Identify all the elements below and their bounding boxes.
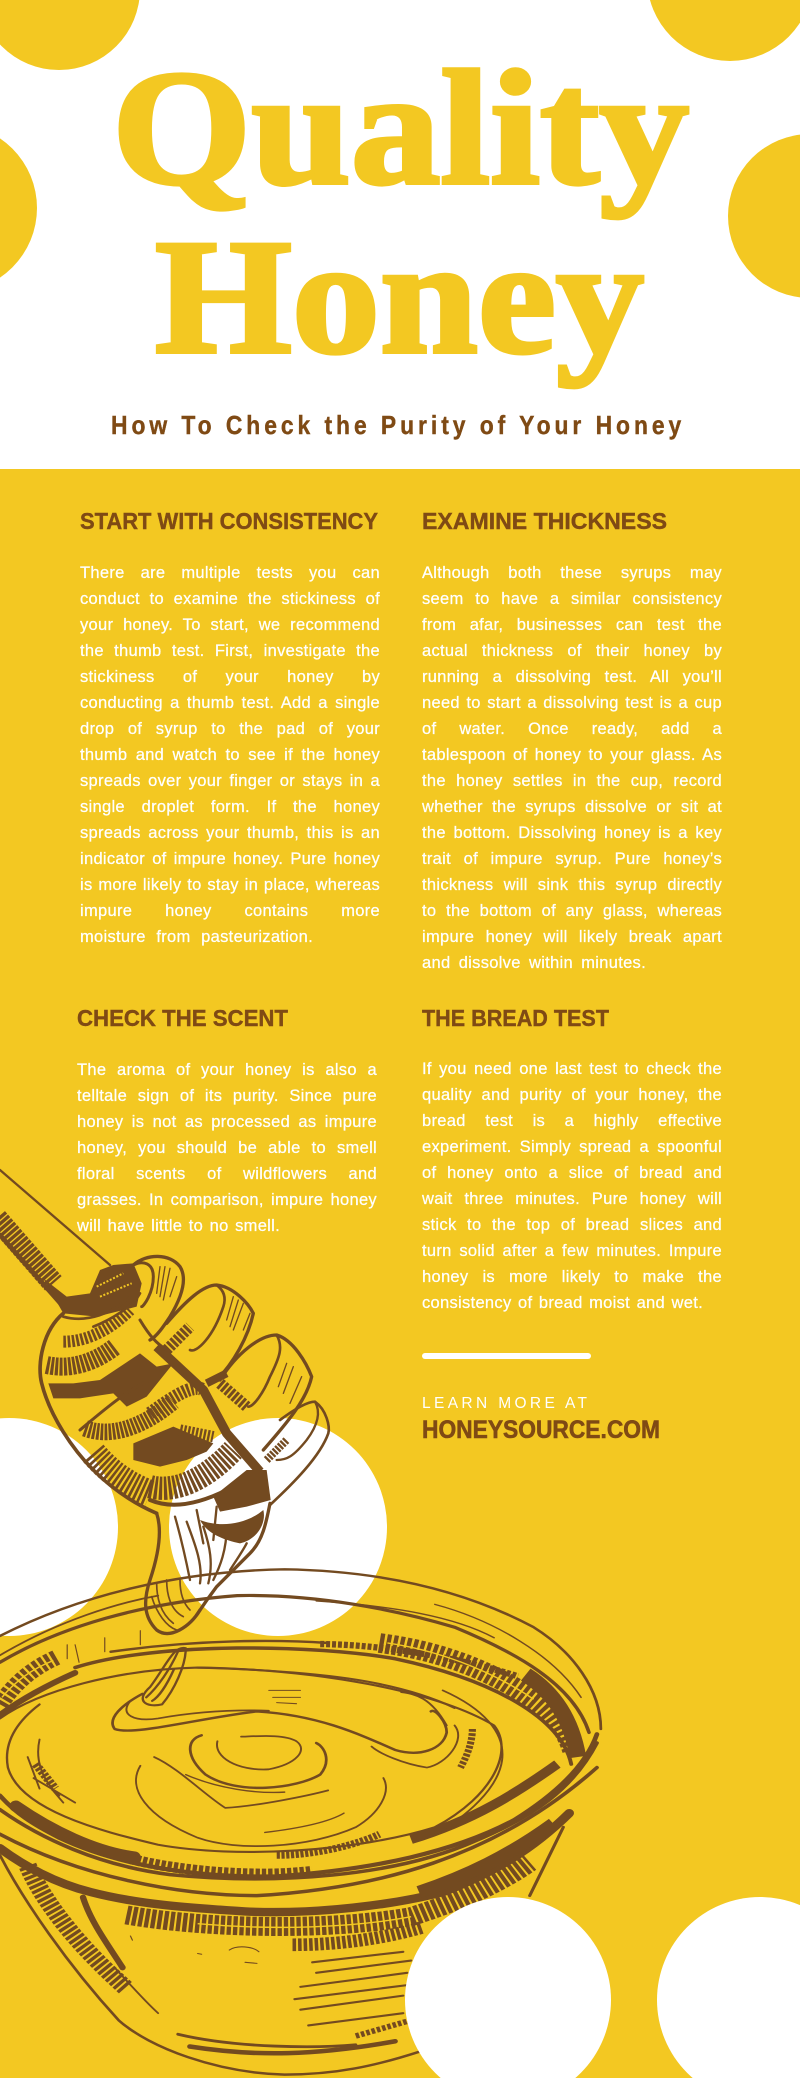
text block: the bread test: stick to the top of bread slices and	[422, 1216, 722, 1234]
text block: examine thickness: actual thickness of their honey by	[422, 642, 722, 660]
text block: check the scent	[76, 1061, 377, 1235]
text block: check the scent: The aroma of your honey is also a	[77, 1061, 377, 1079]
subtitle: How To Check the Purity of Your Honey	[111, 412, 682, 440]
text block: the bread test: consistency of bread moist and wet.	[422, 1294, 703, 1312]
text block: check the scent: honey, you should be able to smell	[77, 1139, 377, 1157]
heading: examine thickness: EXAMINE THICKNESS	[422, 508, 667, 534]
text block: check the scent: grasses. In comparison, impure honey	[77, 1191, 377, 1209]
text block: examine thickness: tablespoon of honey to your glass. As	[422, 746, 722, 764]
text block: start with consistency	[80, 564, 380, 946]
divider rule	[422, 1353, 591, 1359]
text block: examine thickness: and dissolve within minutes.	[422, 954, 646, 972]
text block: start with consistency: single droplet form. If the honey	[80, 798, 380, 816]
text block: examine thickness: of water. Once ready, add a	[422, 720, 722, 738]
text block: examine thickness: whether the syrups dissolve or sit at	[422, 798, 722, 816]
text block: examine thickness: impure honey will likely break apart	[422, 928, 722, 946]
text block: start with consistency: spreads over your finger or stays in a	[80, 772, 380, 790]
text block: check the scent: honey is not as processed as impure	[77, 1113, 377, 1131]
text block: examine thickness: need to start a dissolving test is a cup	[422, 694, 722, 712]
white circle: bottom right	[657, 1897, 800, 2100]
text block: check the scent: telltale sign of its purity. Since pure	[77, 1087, 377, 1105]
heading: the bread test: THE BREAD TEST	[422, 1005, 609, 1031]
call to action website: HONEYSOURCE.COM	[422, 1416, 660, 1444]
text block: start with consistency: is more likely to stay in place, whereas	[80, 876, 380, 894]
decorative circle: middle right	[728, 134, 800, 298]
text block: start with consistency: spreads across your thumb, this is an	[80, 824, 380, 842]
text block: examine thickness: the bottom. Dissolving honey is a key	[422, 824, 722, 842]
text block: examine thickness: from afar, businesses can test the	[422, 616, 722, 634]
text block: the bread test: turn solid after a few minutes. Impure	[422, 1242, 722, 1260]
white circle: behind dipper left	[0, 1418, 118, 1636]
decorative circle: top right	[647, 0, 800, 61]
text block: examine thickness: trait of impure syrup. Pure honey’s	[422, 850, 722, 868]
panel: yellow background	[0, 469, 800, 2078]
text block: the bread test: wait three minutes. Pure honey will	[422, 1190, 722, 1208]
text block: start with consistency: impure honey contains more	[80, 902, 380, 920]
text block: examine thickness: Although both these syrups may	[422, 564, 722, 582]
text block: start with consistency: the thumb test. First, investigate the	[80, 642, 380, 660]
text block: check the scent: floral scents of wildflowers and	[77, 1165, 377, 1183]
text block: examine thickness: running a dissolving test. All you’ll	[422, 668, 722, 686]
text block: start with consistency: stickiness of your honey by	[80, 668, 380, 686]
text block: the bread test: bread test is a highly effective	[422, 1112, 722, 1130]
title: Honey: Honey	[155, 207, 644, 388]
text block: start with consistency: indicator of impure honey. Pure honey	[80, 850, 380, 868]
text block: examine thickness	[422, 564, 722, 972]
text block: the bread test: quality and purity of your honey, the	[422, 1086, 722, 1104]
text block: start with consistency: drop of syrup to the pad of your	[80, 720, 380, 738]
white circle: bottom middle	[405, 1897, 611, 2100]
text block: check the scent: will have little to no smell.	[77, 1217, 280, 1235]
text block: start with consistency: conducting a thumb test. Add a single	[80, 694, 380, 712]
decorative circle: middle left	[0, 124, 37, 292]
illustration: honey bowl	[0, 1569, 601, 2075]
title: Quality: Quality	[112, 38, 689, 219]
text block: the bread test: of honey onto a slice of bread and	[422, 1164, 722, 1182]
text block: start with consistency: conduct to examine the stickiness of	[80, 590, 380, 608]
heading: start with consistency: START WITH CONSISTENCY	[80, 508, 378, 534]
call to action label: LEARN MORE AT	[422, 1395, 588, 1412]
text block: start with consistency: your honey. To start, we recommend	[80, 616, 380, 634]
text block: start with consistency: thumb and watch to see if the honey	[80, 746, 380, 764]
text block: the bread test: experiment. Simply spread a spoonful	[422, 1138, 722, 1156]
text block: the bread test: honey is more likely to make the	[422, 1268, 722, 1286]
text block: examine thickness: seem to have a similar consistency	[422, 590, 722, 608]
illustration: honey dipper	[0, 1170, 329, 1633]
text block: examine thickness: to the bottom of any glass, whereas	[422, 902, 722, 920]
white circle: behind dipper right	[169, 1418, 387, 1636]
text block: the bread test: If you need one last test to check the	[422, 1060, 722, 1078]
text block: examine thickness: thickness will sink this syrup directly	[422, 876, 722, 894]
text block: examine thickness: the honey settles in the cup, record	[422, 772, 722, 790]
text block: the bread test	[422, 1060, 722, 1312]
text block: start with consistency: There are multiple tests you can	[80, 564, 380, 582]
decorative circle: top left	[0, 0, 140, 70]
text block: start with consistency: moisture from pasteurization.	[80, 928, 313, 946]
heading: check the scent: CHECK THE SCENT	[77, 1005, 288, 1031]
